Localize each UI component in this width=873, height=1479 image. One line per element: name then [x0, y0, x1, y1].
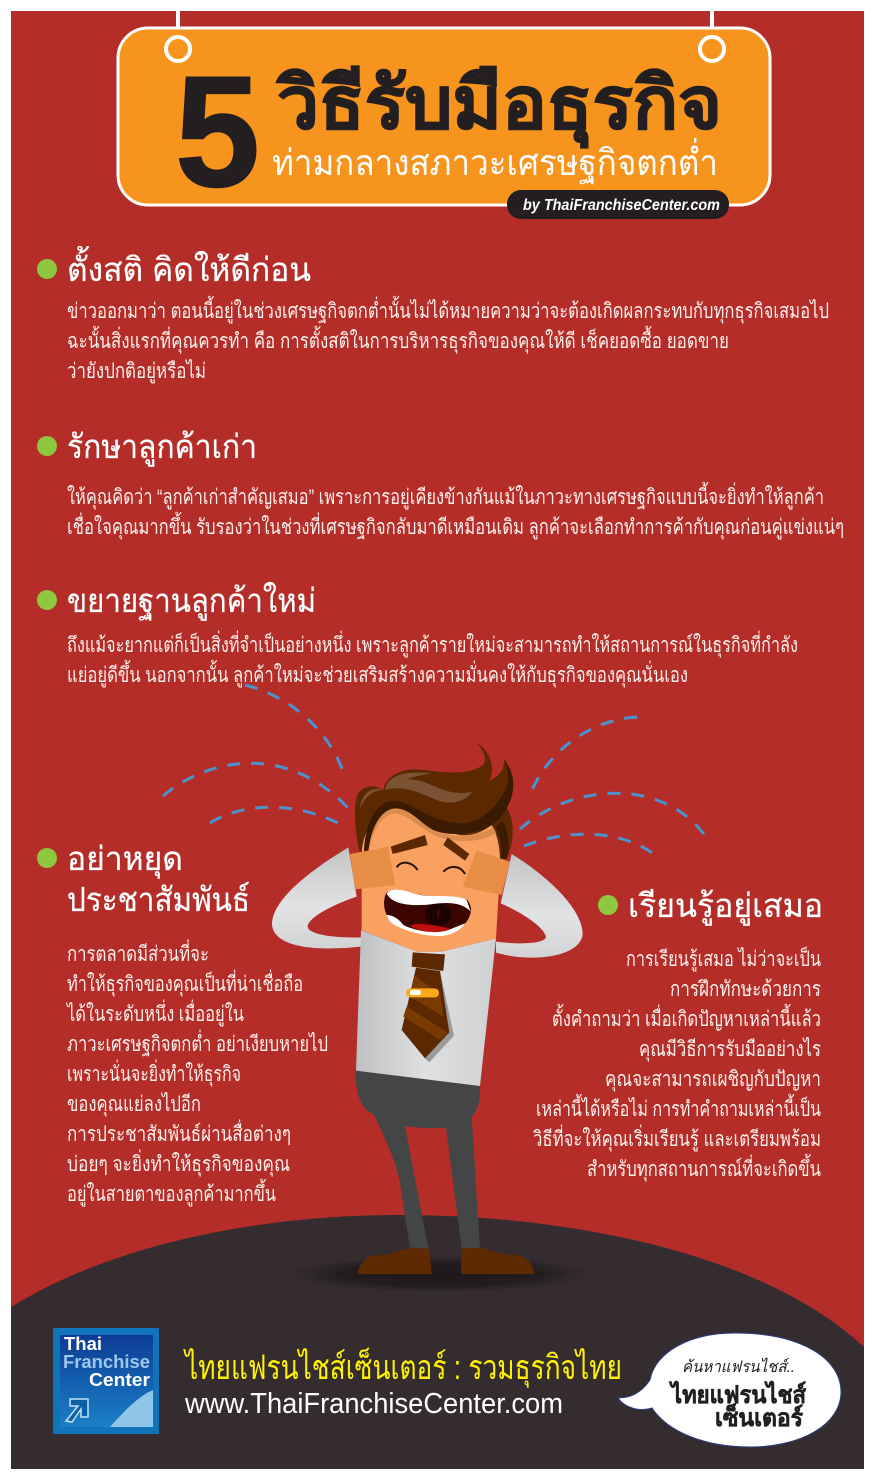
section 1: text: ว่ายังปกติอยู่หรือไม่: [67, 359, 206, 384]
eyes: [397, 863, 465, 874]
section 4: heading: ประชาสัมพันธ์: [67, 881, 250, 918]
footer: URL: www.ThaiFranchiseCenter.com: [184, 1388, 563, 1420]
section 4: text: ทำให้ธุรกิจของคุณเป็นที่น่าเชื่อถือ: [67, 969, 303, 997]
character: facial features: [350, 835, 510, 895]
character: head: [355, 742, 513, 952]
character: mouth: [384, 890, 471, 936]
forehead shade: [367, 808, 496, 847]
hair silhouette: [355, 742, 513, 859]
section 5: text: การเรียนรู้เสมอ ไม่ว่าจะเป็น: [626, 945, 821, 972]
hair highlight: [385, 772, 473, 803]
left sleeve: [272, 847, 361, 948]
logo: Thai: [64, 1334, 102, 1354]
face: [362, 805, 500, 952]
section 3: text: [67, 630, 798, 688]
hair shadow band: [364, 759, 513, 853]
by-line pill: by ThaiFranchiseCenter.com: [523, 197, 720, 214]
speech bubble: [618, 1333, 841, 1447]
dashed stress lines: [163, 685, 706, 858]
eyebrows: [391, 835, 428, 854]
main title: วิธีรับมือธุรกิจ: [275, 64, 722, 149]
section 4: text: บ่อยๆ จะยิ่งทำให้ธุรกิจของคุณ: [67, 1149, 290, 1177]
section 3: text: แย่อยู่ดีขึ้น นอกจากนั้น ลูกค้าใหม่จะช่วยเสริมสร้างความมั่นคงให้กับธุรกิจของคุณนั่นเอง: [67, 660, 688, 688]
section 4: text: [65, 939, 328, 1207]
section 1: heading: ตั้งสติ คิดให้ดีก่อน: [67, 246, 311, 288]
section 4: heading: [37, 840, 250, 918]
section 5: text: คุณจะสามารถเผชิญกับปัญหา: [605, 1068, 821, 1092]
logo: Center: [89, 1370, 150, 1390]
section 1: text: [67, 296, 829, 384]
section 5: heading: เรียนรู้อยู่เสมอ: [628, 887, 823, 926]
section 4: text: ภาวะเศรษฐกิจตกต่ำ อย่าเงียบหายไป: [67, 1029, 328, 1056]
character: tie: [402, 952, 454, 1062]
character: legs and shoes: [356, 1071, 535, 1274]
ground shadow: [290, 1256, 590, 1292]
speech bubble: ไทยแฟรนไชส์: [668, 1380, 806, 1409]
character: arms and shirt: [272, 847, 583, 1086]
section 3: heading: ขยายฐานลูกค้าใหม่: [67, 582, 316, 621]
section 5: text: คุณมีวิธีการรับมืออย่างไร: [639, 1037, 821, 1062]
logo: Franchise: [63, 1352, 150, 1372]
hands: [350, 847, 395, 889]
section 5: text: [533, 945, 821, 1182]
number 5: 5: [175, 44, 260, 220]
section 2: text: [67, 482, 844, 540]
section 5: text: การฝึกทักษะด้วยการ: [670, 978, 821, 1001]
section 4: text: อยู่ในสายตาของลูกค้ามากขึ้น: [67, 1179, 276, 1207]
subtitle: ท่ามกลางสภาวะเศรษฐกิจตกต่ำ: [272, 138, 718, 185]
section 4: text: ของคุณแย่ลงไปอีก: [67, 1092, 201, 1117]
section 4: text: การประชาสัมพันธ์ผ่านสื่อต่างๆ: [67, 1119, 291, 1146]
section 4: heading: อย่าหยุด: [67, 840, 183, 879]
section 2: heading: รักษาลูกค้าเก่า: [67, 428, 257, 467]
section 4: text: ได้ในระดับหนึ่ง เมื่ออยู่ใน: [65, 999, 244, 1027]
section 4: text: เพราะนั่นจะยิ่งทำให้ธุรกิจ: [67, 1059, 241, 1087]
title sign: [118, 11, 770, 220]
dark ground: [11, 1215, 864, 1469]
speech bubble: เซ็นเตอร์: [715, 1403, 803, 1432]
section 1: text: ฉะนั้นสิ่งแรกที่คุณควรทำ คือ การตั้งสติในการบริหารธุรกิจของคุณให้ดี เช็คยอดซื้อ ยอดขาย: [67, 326, 729, 354]
speech bubble: ค้นหาแฟรนไชส์..: [682, 1357, 795, 1376]
by-line pill: [507, 190, 729, 219]
right sleeve: [496, 854, 583, 958]
logo: [53, 1328, 159, 1434]
footer: Thai title: ไทยแฟรนไชส์เซ็นเตอร์ : รวมธุรกิจไทย: [183, 1347, 622, 1388]
shirt: [356, 930, 496, 1086]
section 4: text: การตลาดมีส่วนที่จะ: [67, 939, 209, 966]
